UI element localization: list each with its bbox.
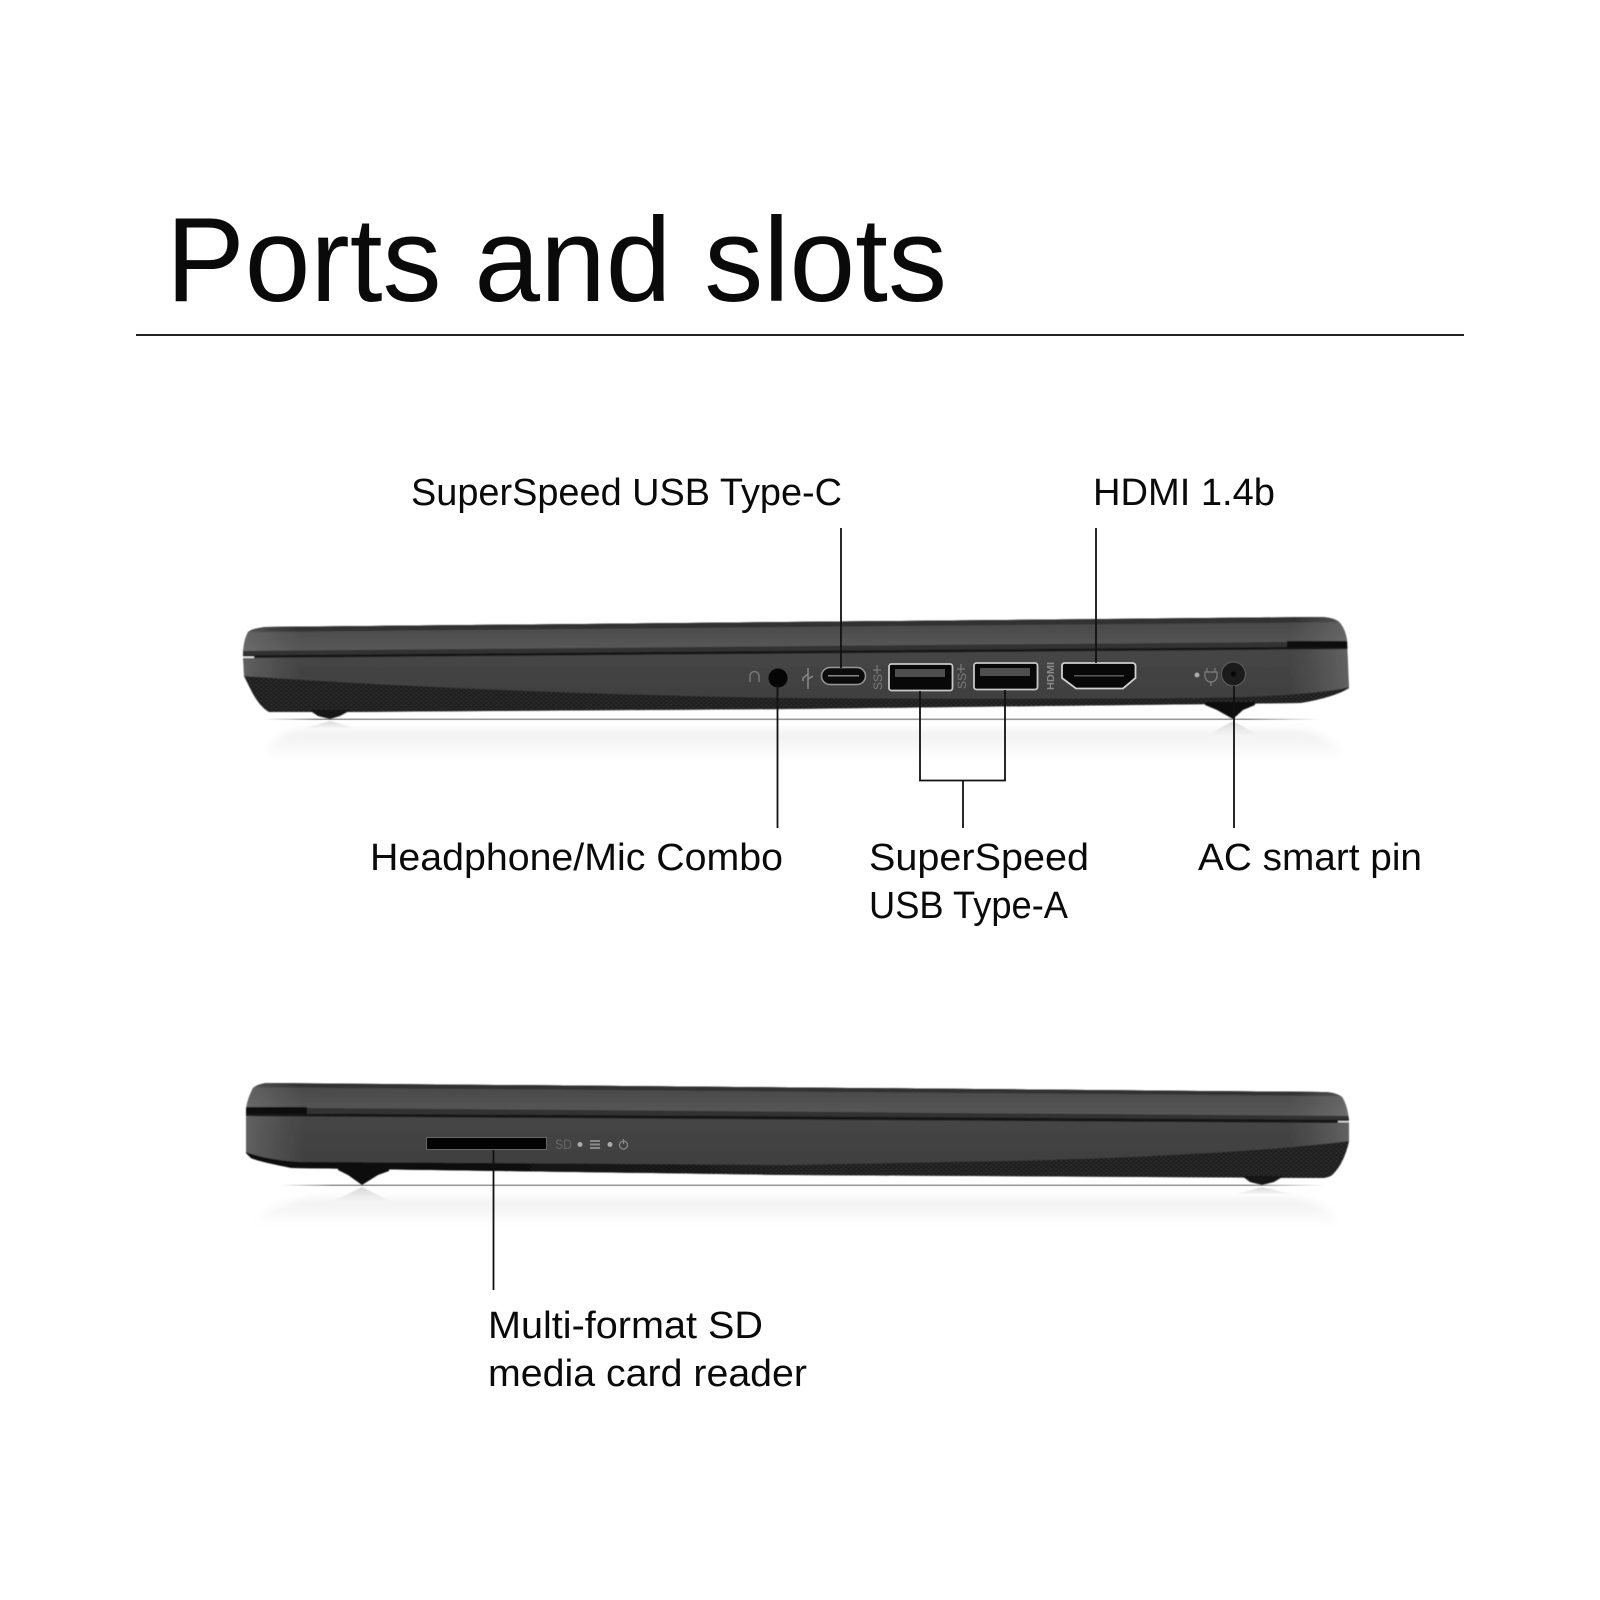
leader: headphone bbox=[776, 685, 778, 828]
leader: ac pin bbox=[1233, 686, 1235, 828]
leader: sd reader bbox=[492, 1150, 494, 1290]
floor reflection bbox=[262, 718, 1345, 760]
label: headphone: Headphone/Mic Combo bbox=[370, 837, 783, 879]
leader lines bbox=[494, 528, 1234, 1290]
title rule bbox=[136, 334, 1464, 336]
icon: usb bbox=[803, 668, 813, 689]
leader: hdmi bbox=[1095, 528, 1097, 663]
icon: headphone bbox=[750, 672, 759, 682]
label: usb-a: USB Type-A bbox=[869, 885, 1069, 927]
leader: usb-a bracket bbox=[919, 690, 1006, 828]
rubber feet bbox=[309, 702, 1255, 719]
laptop: right side view with sd slot bbox=[245, 1082, 1350, 1212]
label: sd reader bbox=[488, 1305, 807, 1395]
icon: hdmi marker: HDMI bbox=[1046, 662, 1057, 690]
icon: power plug bbox=[1205, 668, 1217, 686]
laptop: left side view with ports bbox=[242, 616, 1350, 744]
label: usb-a: SuperSpeed bbox=[869, 837, 1089, 879]
icon: superspeed usb left: SS bbox=[871, 674, 885, 690]
label: ac pin: AC smart pin bbox=[1198, 837, 1422, 879]
title: Ports and slots bbox=[166, 193, 947, 327]
laptop body bbox=[240, 610, 1355, 720]
port: usb-a two bbox=[974, 663, 1038, 690]
port: headphone jack bbox=[768, 668, 788, 688]
port: usb-c bbox=[822, 668, 866, 684]
port: sd card slot bbox=[426, 1138, 546, 1150]
rubber feet bbox=[338, 1166, 1284, 1185]
port: ac smart pin bbox=[1222, 662, 1246, 686]
icon: superspeed usb right: SS bbox=[955, 673, 969, 689]
laptop body bbox=[245, 1082, 1350, 1186]
status icons bbox=[578, 1139, 628, 1149]
label: sd reader: Multi-format SD bbox=[488, 1305, 763, 1347]
floor reflection bbox=[250, 1184, 1340, 1225]
label: sd reader: media card reader bbox=[488, 1353, 807, 1395]
port: usb-a one bbox=[889, 664, 952, 690]
label: usb-a bbox=[869, 837, 1089, 927]
label: hdmi: HDMI 1.4b bbox=[1093, 472, 1275, 514]
label: usb-c: SuperSpeed USB Type-C bbox=[411, 472, 842, 514]
icon: superspeed usb right bbox=[955, 664, 969, 689]
leader: usb-c bbox=[840, 528, 842, 668]
icon: sd marker: SD bbox=[555, 1136, 572, 1152]
indicator light bbox=[1194, 672, 1200, 678]
icon: superspeed usb left bbox=[871, 665, 885, 690]
port: hdmi bbox=[1062, 663, 1136, 688]
